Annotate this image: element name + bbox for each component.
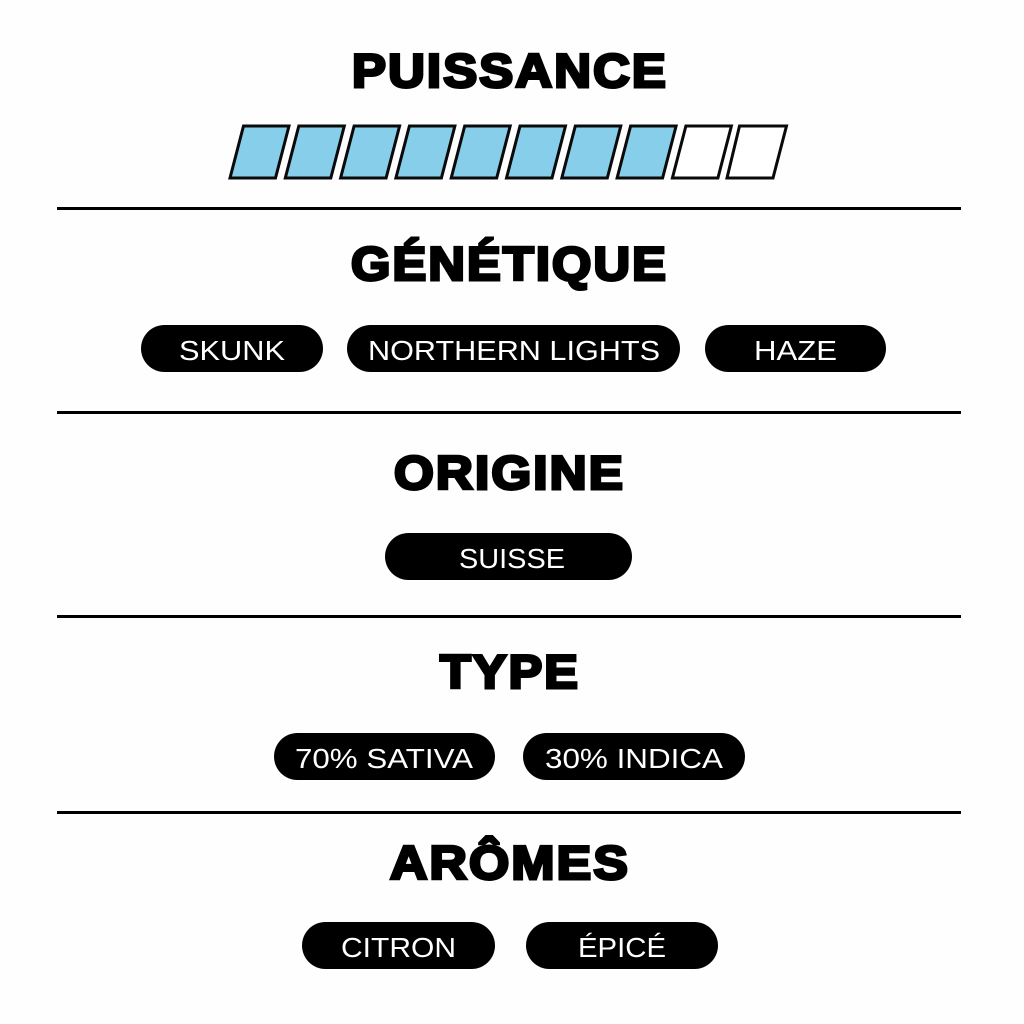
heading: origine: ORIGINE — [394, 447, 625, 500]
pill: northern lights: NORTHERN LIGHTS — [368, 335, 660, 366]
heading: génétique: GÉNÉTIQUE — [351, 237, 668, 291]
pill: 70% sativa — [274, 733, 495, 780]
pill: 30% indica — [523, 733, 745, 780]
heading: arômes: ARÔMES — [390, 835, 630, 890]
pill: épicé: ÉPICÉ — [578, 932, 666, 963]
pill: haze — [705, 325, 886, 372]
pill: haze: HAZE — [754, 335, 837, 366]
pill: 30% indica: 30% INDICA — [545, 743, 723, 774]
pill: skunk: SKUNK — [179, 335, 285, 366]
pill: suisse: SUISSE — [459, 543, 565, 574]
pill: northern lights — [347, 325, 680, 372]
pill: épicé — [526, 922, 718, 969]
pill: skunk — [141, 325, 323, 372]
heading: puissance: PUISSANCE — [352, 45, 668, 98]
pill: 70% sativa: 70% SATIVA — [295, 743, 473, 774]
heading: type: TYPE — [440, 646, 580, 699]
pill: suisse — [385, 533, 632, 580]
pill: citron: CITRON — [341, 932, 456, 963]
power gauge: 8 of 10 segments — [230, 126, 786, 178]
pill: citron — [302, 922, 495, 969]
